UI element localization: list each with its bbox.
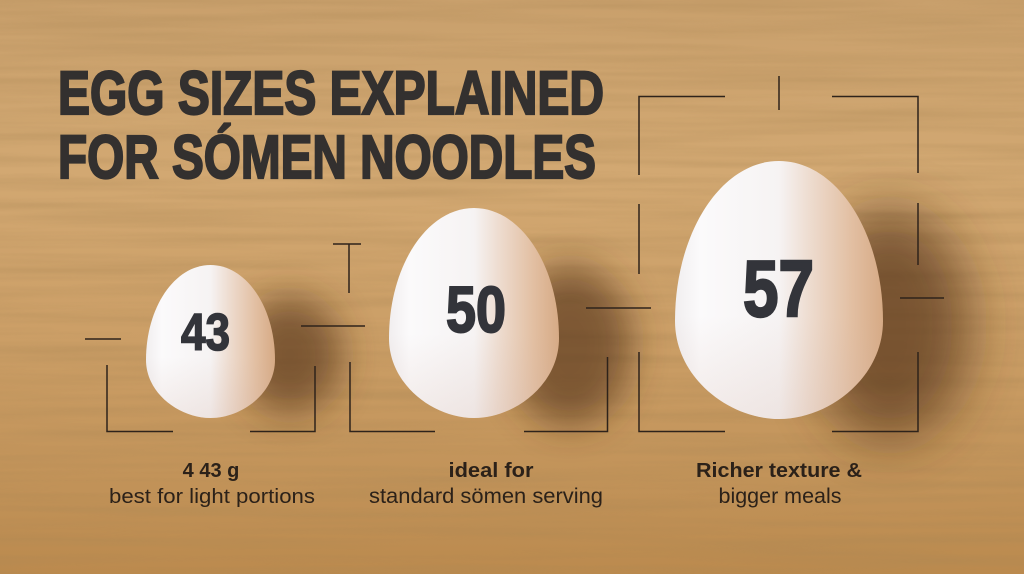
caption: small egg [109,460,315,508]
measurement guides: large egg [639,76,944,432]
egg: 43 [146,265,275,418]
egg: 57 [675,161,883,419]
egg shadows [238,210,970,440]
egg: 50 [389,208,559,418]
caption: medium egg: standard sömen serving [369,485,603,508]
caption: small egg: best for light portions [109,486,315,508]
caption: medium egg [369,460,603,508]
measurement guides: medium egg [350,308,651,432]
title [58,59,604,191]
caption: large egg: bigger meals [718,485,842,508]
caption: small egg: 4 43 g [183,460,239,482]
measurement guides: small egg [85,244,365,432]
caption: medium egg: ideal for [448,460,534,482]
title: FOR SÓMEN NOODLES [58,123,596,191]
egg number 50: 50 [446,273,506,346]
egg number 43: 43 [181,304,230,362]
egg number 57: 57 [743,244,814,333]
caption: large egg: Richer texture & [696,460,862,482]
caption: large egg [696,460,862,508]
title: EGG SIZES EXPLAINED [58,59,604,127]
